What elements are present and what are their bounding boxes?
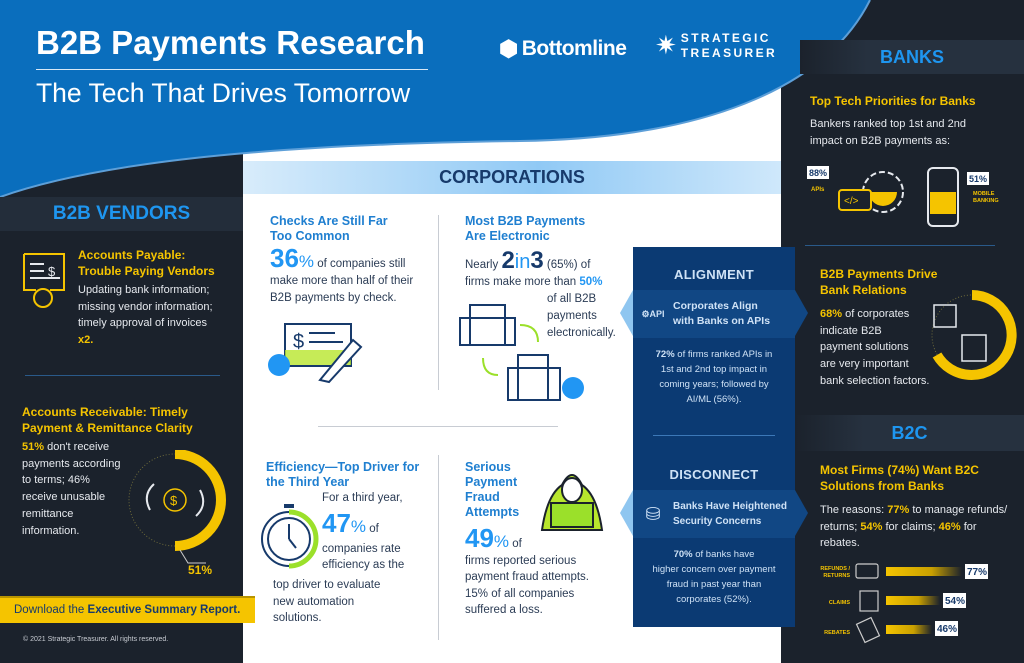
panel: fraud: suffered a loss. <box>465 604 543 616</box>
text: b2c: rebates. <box>820 537 860 549</box>
panel: checks: 36% of companies still <box>270 243 405 273</box>
text: accounts receivable: information. <box>22 525 79 537</box>
panel: electronic: Nearly 2in3 (65%) of <box>465 247 590 274</box>
text: drive relations: payment solutions <box>820 341 909 353</box>
text: 70%: 70% of banks have <box>674 549 754 560</box>
text: accounts payable: missing vendor information; <box>78 300 213 312</box>
icon: stopwatch <box>261 504 318 568</box>
text: 70%: fraud in past year than <box>667 579 761 590</box>
icon: invoice <box>23 253 65 308</box>
corporations header band <box>243 161 781 194</box>
text: new automation <box>273 596 354 608</box>
text: accounts receivable: remittance <box>22 508 73 520</box>
text: accounts receivable: payments according <box>22 458 120 470</box>
text: b2c: Most Firms (74%) Want B2C <box>820 463 979 477</box>
panel: fraud: firms reported serious <box>465 554 576 566</box>
panel: efficiency <box>266 460 420 489</box>
panel: fraud: Fraud <box>465 490 500 504</box>
panel: fraud: Payment <box>465 475 517 489</box>
band: security: Banks Have Heightened <box>673 501 787 512</box>
download banner: Download the Executive Summary Report. <box>14 604 240 616</box>
text: accounts receivable: to terms; 46% <box>22 474 90 486</box>
icon: hacker laptop <box>540 474 604 531</box>
panel: electronic: Are Electronic <box>465 229 550 243</box>
panel: electronic: electronically. <box>547 327 616 339</box>
right: banks header <box>800 40 1024 74</box>
icon: APIs gear 88% <box>807 166 904 213</box>
divider horizontal <box>318 426 558 427</box>
panel: fraud: Serious <box>465 460 511 474</box>
title: The Tech That Drives Tomorrow <box>36 78 410 108</box>
text: drive relations: Bank Relations <box>820 282 907 296</box>
panel: electronic: payments <box>547 310 597 322</box>
icon: APIs gear 88%: 88% <box>809 168 827 178</box>
text: 47% of <box>322 508 379 538</box>
heading: alignment: ALIGNMENT <box>674 267 754 282</box>
logo: Bottomline: ⬢ <box>499 36 518 61</box>
text: drive relations: B2B Payments Drive <box>820 267 937 281</box>
bar chart: b2c reasons: CLAIMS <box>829 600 850 606</box>
bar chart: b2c reasons: 46% <box>937 624 957 635</box>
band: corporates align: ⚙API <box>641 308 665 318</box>
text: accounts payable: timely approval of invoices <box>78 317 207 329</box>
bar chart: b2c reasons: REFUNDS / <box>820 566 850 572</box>
donut: 51% <box>128 450 226 577</box>
panel: fraud: 15% of all companies <box>465 588 574 600</box>
band: corporates align <box>633 290 795 338</box>
text: drive relations <box>820 267 937 387</box>
logo: Strategic Treasurer: STRATEGIC <box>681 30 771 44</box>
text: accounts receivable <box>22 405 193 537</box>
text: accounts payable: Trouble Paying Vendors <box>78 264 215 278</box>
icon: mobile banking 51%: MOBILE <box>973 191 995 197</box>
text: accounts receivable: receive unusable <box>22 491 105 503</box>
text: top tech <box>810 94 976 147</box>
text: 72%: 72% of firms ranked APIs in <box>656 349 772 360</box>
text: b2c: Solutions from Banks <box>820 478 944 492</box>
heading: disconnect: DISCONNECT <box>670 467 758 482</box>
text: top tech: Bankers ranked top 1st and 2nd <box>810 118 966 130</box>
panel: electronic: of all B2B <box>547 293 596 305</box>
text: 72%: AI/ML (56%). <box>686 394 742 405</box>
title: B2B Payments Research <box>36 24 425 61</box>
panel: checks: Too Common <box>270 229 350 243</box>
icon: APIs gear 88%: APIs <box>811 187 825 193</box>
text: 72%: coming years; followed by <box>659 379 769 390</box>
panel: electronic <box>465 214 616 339</box>
band: security: ⛁ <box>645 504 661 524</box>
bar chart: b2c reasons: REBATES <box>824 630 850 636</box>
text: accounts payable: Accounts Payable: <box>78 248 185 262</box>
text: b2c: The reasons: 77% to manage refunds/ <box>820 504 1007 516</box>
bar chart: b2c reasons <box>820 563 988 644</box>
panel: checks: Checks Are Still Far <box>270 214 388 228</box>
download banner <box>0 596 255 623</box>
left: vendors header <box>0 197 243 231</box>
text: b2c <box>820 463 1008 549</box>
panel: alignment/disconnect <box>633 247 795 627</box>
text: 70% <box>652 549 776 605</box>
icon: check and pen: $ <box>293 331 304 353</box>
band: security <box>633 490 795 538</box>
panel: fraud: Attempts <box>465 505 519 519</box>
donut: 51%: 51% <box>188 563 212 577</box>
panel: fraud: payment fraud attempts. <box>465 571 589 583</box>
text: 72%: 1st and 2nd top impact in <box>661 364 767 375</box>
bar chart: b2c reasons: 54% <box>945 596 965 607</box>
panel: fraud: 49% of <box>465 523 522 553</box>
panel: efficiency: Efficiency—Top Driver for <box>266 460 419 474</box>
icon: APIs gear 88%: </> <box>844 196 859 207</box>
text: drive relations: 68% of corporates <box>820 308 909 320</box>
right: banks header: BANKS <box>880 47 944 67</box>
right dark panel background <box>781 0 1024 663</box>
copyright: © 2021 Strategic Treasurer. All rights reserved. <box>23 636 168 643</box>
icon: buildings exchange <box>459 304 584 401</box>
panel: electronic: firms make more than 50% <box>465 276 602 288</box>
band: corporates align: with Banks on APIs <box>673 315 770 327</box>
text: drive relations: bank selection factors. <box>820 375 929 387</box>
text: accounts receivable: Accounts Receivable: Timely <box>22 405 188 419</box>
panel: fraud <box>465 460 589 616</box>
text: efficiency as the <box>322 559 404 571</box>
text: drive relations: are very important <box>820 358 909 370</box>
icon: mobile banking 51%: BANKING <box>973 198 999 204</box>
B2C header <box>795 415 1024 451</box>
left dark panel background <box>0 140 243 663</box>
donut: 68% <box>932 290 1017 380</box>
bar chart: b2c reasons: RETURNS <box>823 573 850 579</box>
text: For a third year, <box>322 492 403 504</box>
divider vertical <box>438 215 439 390</box>
arrows <box>620 290 808 536</box>
panel: checks: make more than half of their <box>270 275 413 287</box>
donut: 51%: $ <box>170 493 178 508</box>
logo: Bottomline: Bottomline <box>522 37 626 60</box>
logo: Strategic Treasurer: ✷ <box>655 30 677 60</box>
logo: Strategic Treasurer: TREASURER <box>681 46 777 60</box>
text: top driver to evaluate <box>273 579 380 591</box>
text: top tech: Top Tech Priorities for Banks <box>810 94 976 108</box>
panel: checks <box>270 214 413 304</box>
text: b2c: returns; 54% for claims; 46% for <box>820 521 977 533</box>
header blue wave <box>0 0 871 197</box>
icon: mobile banking 51% <box>927 167 999 227</box>
panel: electronic: Most B2B Payments <box>465 214 585 228</box>
left: vendors header: B2B VENDORS <box>53 203 190 224</box>
text: accounts payable: x2. <box>78 334 93 346</box>
text: accounts payable <box>78 248 215 346</box>
bar chart: b2c reasons: 77% <box>967 567 987 578</box>
divider vertical 2 <box>438 455 439 640</box>
text: top tech: impact on B2B payments as: <box>810 135 950 147</box>
text: accounts receivable: Payment & Remittance Clarity <box>22 420 193 434</box>
text: drive relations: indicate B2B <box>820 325 882 337</box>
icon: check and pen <box>268 323 362 384</box>
text: accounts payable: Updating bank information; <box>78 284 209 296</box>
title <box>36 24 428 108</box>
logo: Strategic Treasurer <box>655 30 777 60</box>
text: 70%: corporates (52%). <box>676 594 752 605</box>
text: accounts receivable: 51% don't receive <box>22 441 109 453</box>
text: solutions. <box>273 612 322 624</box>
corporations header band: CORPORATIONS <box>439 167 585 187</box>
text: 70%: higher concern over payment <box>652 564 776 575</box>
icon: mobile banking 51%: 51% <box>969 174 987 184</box>
band: security: Security Concerns <box>673 516 761 527</box>
text: companies rate <box>322 542 401 554</box>
panel: checks: B2B payments by check. <box>270 292 397 304</box>
B2C header: B2C <box>891 423 928 443</box>
band: corporates align: Corporates Align <box>673 300 758 312</box>
panel: efficiency: the Third Year <box>266 475 349 489</box>
text: 72% <box>656 349 772 405</box>
icon: invoice: $ <box>48 264 56 279</box>
